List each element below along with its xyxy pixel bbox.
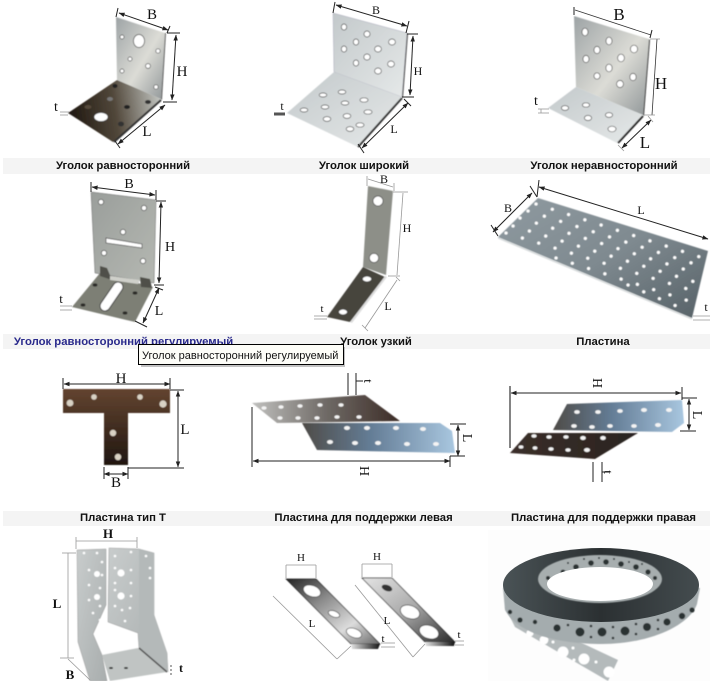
left strip (286, 579, 380, 649)
dimensions: t (704, 300, 708, 314)
dimensions: t (320, 303, 324, 315)
dimensions: L (180, 422, 190, 438)
dimensions: t (361, 379, 376, 383)
dimensions: t (381, 633, 385, 645)
dimensions: B (124, 177, 134, 192)
T-shaped plate (63, 389, 170, 465)
dimensions: H (414, 64, 423, 78)
dimensions: H (103, 526, 113, 541)
dimensions: H (356, 466, 371, 476)
dimensions: t (179, 661, 183, 675)
dimensions: t (59, 291, 63, 306)
caption strip backgrounds (3, 158, 710, 526)
panel: T plate (63, 371, 190, 524)
caption: Уголок широкий (319, 160, 409, 172)
dimensions (491, 180, 710, 320)
bracket drawing (72, 192, 156, 322)
dimensions: H (297, 552, 305, 564)
dimensions: H (403, 221, 412, 235)
dimensions (252, 373, 474, 476)
caption: Уголок равносторонний (56, 160, 190, 172)
dimensions: L (390, 122, 398, 136)
coil inner perforated band (538, 555, 662, 603)
panel: adjustable equal bracket (14, 177, 233, 348)
dimensions: H (589, 378, 604, 388)
dimensions: B (613, 5, 625, 24)
panel: perforated strap coil (488, 530, 710, 681)
dimensions: t (601, 470, 616, 474)
panel: wide bracket (274, 2, 423, 172)
caption: Уголок узкий (340, 336, 412, 348)
dimensions: B (372, 3, 380, 17)
panel: plate (491, 180, 710, 348)
coil centre opening (547, 567, 653, 601)
panel: left support plate (252, 373, 474, 524)
bracket drawing (327, 186, 393, 323)
dimensions (59, 177, 175, 327)
coil background (488, 530, 710, 681)
dimensions: L (155, 304, 163, 319)
dimensions: t (280, 99, 284, 113)
dimensions (63, 371, 190, 491)
bracket drawing (287, 13, 408, 147)
bracket drawing (68, 17, 166, 142)
right strip (362, 578, 455, 646)
dimensions (510, 378, 704, 482)
caption: Пластина тип Т (80, 512, 166, 524)
caption: Пластина для поддержки левая (274, 512, 453, 524)
dimensions: t (457, 629, 461, 641)
dimensions (54, 7, 188, 148)
dimensions: L (689, 411, 704, 419)
support plate drawing (252, 395, 455, 453)
support plate drawing (510, 400, 684, 459)
panel: flat strip connectors (273, 551, 464, 659)
dimensions (273, 551, 464, 659)
hanger drawing (77, 548, 168, 681)
caption: Уголок равносторонний регулируемый (14, 336, 233, 348)
dimensions (274, 2, 423, 153)
perforated plate (498, 198, 708, 319)
strap tail (505, 607, 618, 681)
dimensions: H (373, 551, 381, 563)
dimensions: L (640, 133, 650, 152)
panel: unequal angle bracket (530, 5, 678, 172)
dimensions: L (637, 203, 645, 217)
dimensions: L (53, 596, 62, 611)
panel: joist hanger (53, 526, 183, 681)
caption: Пластина для поддержки правая (511, 512, 696, 524)
bracket drawing (548, 16, 650, 143)
dimensions: H (116, 371, 127, 387)
coil dark outer wrap (503, 548, 699, 622)
tooltip (138, 344, 345, 367)
dimensions: B (504, 201, 512, 215)
dimensions: L (459, 434, 474, 442)
coil lower perforated band (503, 588, 700, 644)
dimensions: t (54, 100, 58, 115)
dimensions: B (147, 7, 157, 23)
dimensions: L (142, 124, 152, 140)
tooltip: Уголок равносторонний регулируемый (142, 350, 338, 362)
caption: Уголок неравносторонний (530, 160, 678, 172)
dimensions: L (384, 299, 392, 313)
panel: narrow bracket (314, 172, 412, 348)
panel: right support plate (510, 378, 704, 524)
caption: Пластина (576, 336, 630, 348)
panel: equal angle bracket (54, 7, 190, 172)
dimensions (53, 526, 183, 681)
dimensions: B (111, 475, 121, 491)
dimensions: H (165, 240, 175, 255)
dimensions: L (384, 615, 391, 627)
dimensions (534, 5, 667, 152)
dimensions: t (534, 94, 538, 109)
dimensions: B (380, 172, 388, 186)
dimensions (314, 172, 412, 331)
dimensions: H (177, 64, 188, 80)
dimensions: L (309, 618, 316, 630)
dimensions: H (655, 74, 667, 93)
